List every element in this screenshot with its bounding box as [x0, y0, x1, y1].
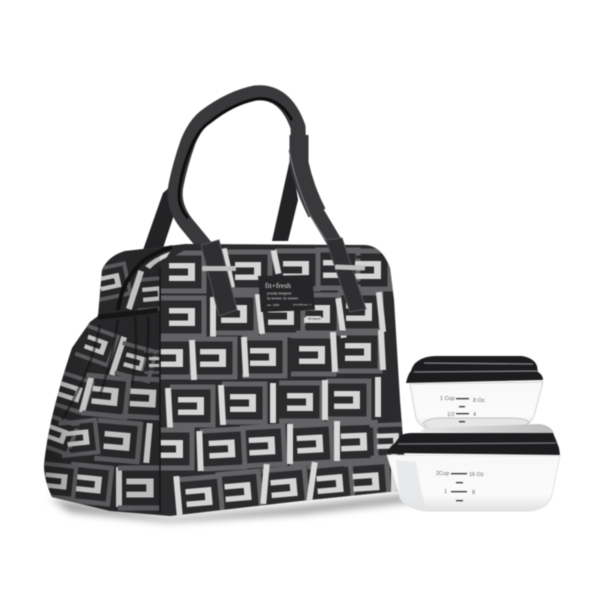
right metal bar [335, 264, 365, 271]
product photo: lunch bag with two food containers [43, 84, 561, 527]
large container measures: 16 Oz [469, 472, 484, 478]
small container measures: 1/2 [447, 412, 455, 418]
large container measures: 1 [444, 489, 447, 495]
large lid top surface [420, 424, 554, 434]
small container inner base [423, 418, 529, 430]
large container measures: 8 [472, 490, 475, 496]
small tag on bag: fit+fresh [308, 317, 321, 321]
large container measures: 2Cup [436, 471, 449, 477]
pocket elastic cord [98, 310, 158, 317]
front handle [175, 93, 335, 257]
small container lid [406, 356, 543, 383]
small container measures: 8 Oz [473, 398, 485, 404]
small tag on bag [306, 316, 321, 321]
ground shadow [50, 494, 410, 522]
brand label: proudly designed [267, 292, 292, 296]
bag body base [44, 244, 407, 516]
left handle strap [201, 240, 237, 316]
small container measures: 1 Cup [440, 396, 455, 402]
large container body [387, 455, 560, 511]
brand label: est. 2005 [267, 303, 280, 307]
brand label: fit+fresh [265, 281, 291, 290]
small container body [410, 382, 543, 430]
brand label: by women, for women [267, 296, 298, 300]
left metal bar [202, 266, 236, 271]
large container left tint [396, 460, 427, 509]
front side seam [159, 268, 161, 513]
small container measures [440, 396, 485, 422]
back handle [143, 155, 298, 250]
right handle strap [326, 238, 366, 312]
brand label [258, 275, 315, 312]
small container measures: 4 [473, 412, 476, 418]
small lid highlight [414, 363, 538, 372]
large container measures [436, 471, 484, 501]
large lid highlight [398, 443, 556, 444]
brand label: providence, ri [293, 302, 311, 306]
large container lid [387, 433, 560, 455]
large container [387, 424, 560, 511]
zipper seam [118, 247, 172, 310]
small container [406, 356, 543, 430]
panel: bag front pattern [149, 248, 407, 518]
panel: bag side with pocket pattern [44, 251, 170, 511]
